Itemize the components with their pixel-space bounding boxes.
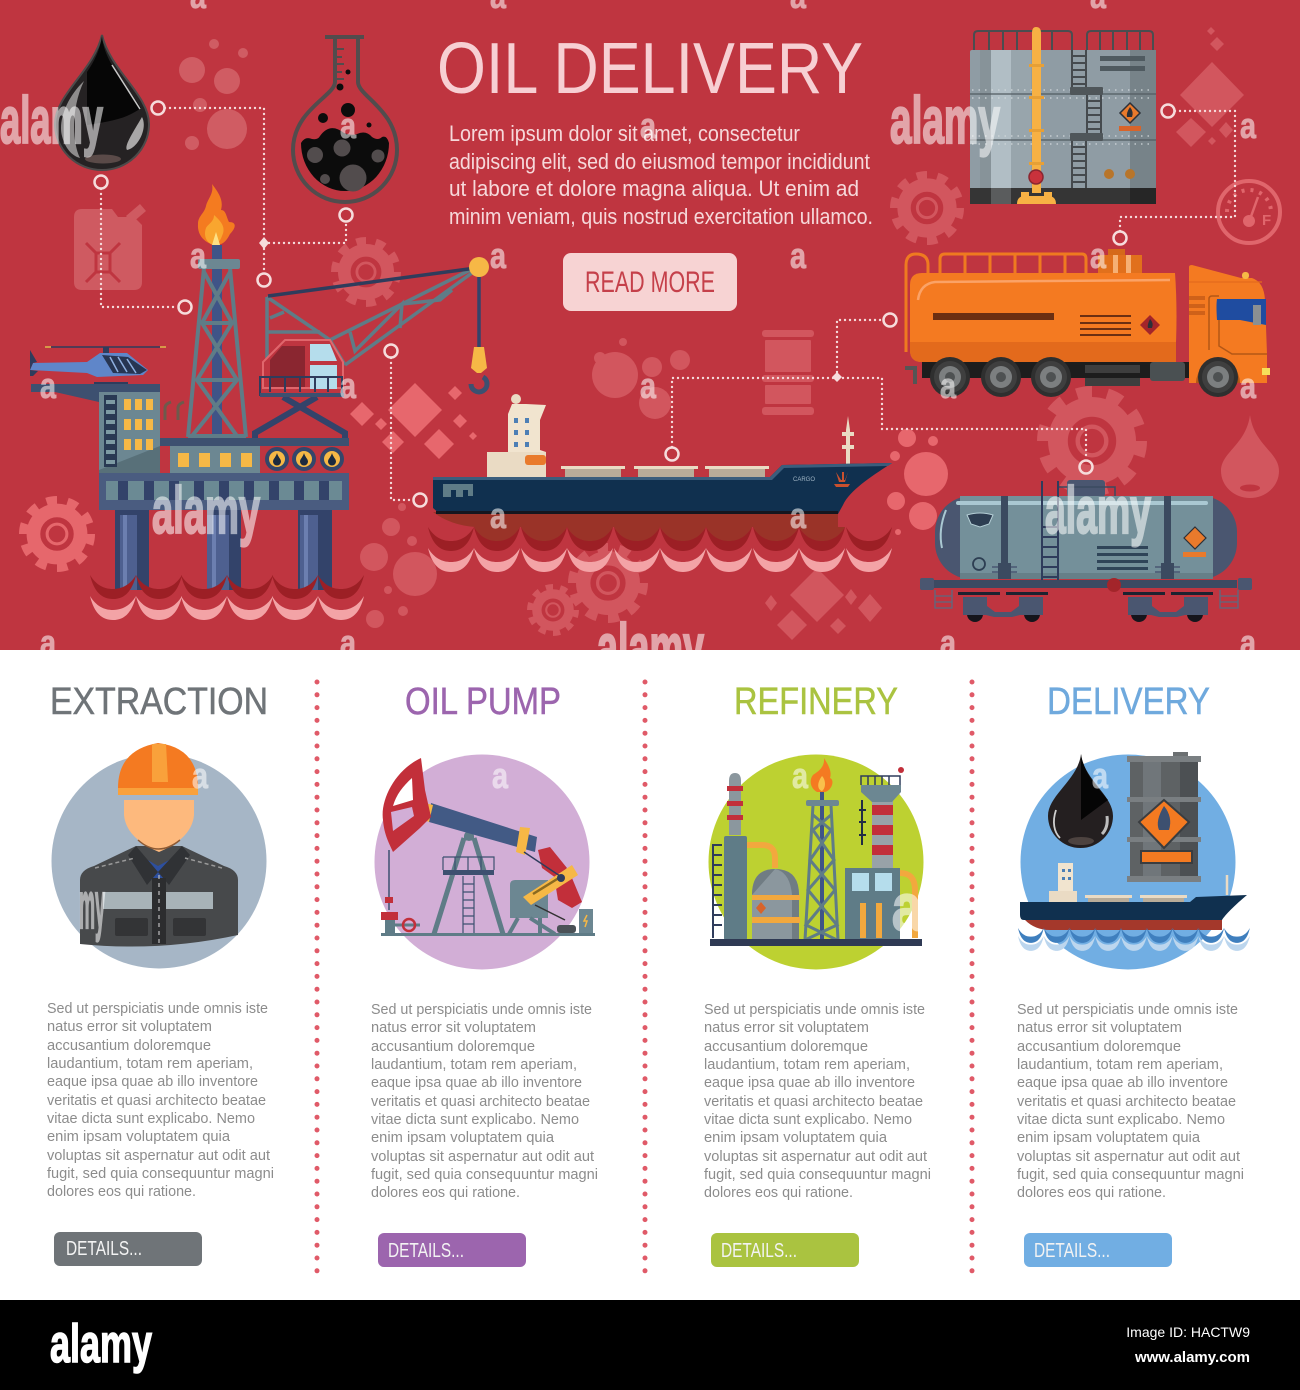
body text: delivery: Sed ut perspiciatis unde omnis iste xyxy=(1017,1001,1238,1018)
decorative background icons xyxy=(24,27,1280,640)
illustration: storage tank xyxy=(970,27,1156,204)
icon: refinery xyxy=(708,754,924,970)
watermark overlays: a xyxy=(1240,365,1257,406)
exhaust pipes xyxy=(165,402,184,420)
watermark overlays: a xyxy=(192,755,209,796)
watermark overlays: a xyxy=(340,365,357,406)
derrick xyxy=(188,245,246,438)
body text: oil pump: Sed ut perspiciatis unde omnis iste xyxy=(371,1001,592,1018)
column: delivery xyxy=(1017,681,1250,1267)
icon: worker xyxy=(52,743,266,968)
body text: refinery: voluptas sit aspernatur aut odit aut xyxy=(704,1148,928,1165)
icon: flask xyxy=(293,35,397,202)
truck wheels xyxy=(930,357,1238,397)
tank ladders xyxy=(1072,50,1101,188)
watermark overlays: a xyxy=(490,495,507,536)
heading: delivery: DELIVERY xyxy=(1047,681,1210,723)
body text: oil pump: vitae dicta sunt explicabo. Nemo xyxy=(371,1111,579,1128)
watermark overlays: a xyxy=(1090,235,1107,276)
body text: extraction: fugit, sed quia consequuntur magni xyxy=(47,1165,274,1182)
platform waves xyxy=(90,575,364,620)
decor: bubbles left of ship xyxy=(360,503,437,628)
watermark overlays xyxy=(0,0,1257,944)
delivery waves xyxy=(1018,928,1250,951)
read more button xyxy=(563,253,737,311)
column: extraction xyxy=(47,681,274,1266)
watermark overlays: a xyxy=(340,622,357,663)
decor: large drop xyxy=(1221,415,1279,498)
crane xyxy=(255,257,489,438)
ship hull: CARGO xyxy=(793,477,815,483)
body text: extraction: laudantium, totam rem aperiam, xyxy=(47,1055,253,1072)
footer image id: Image ID: HACTW9 xyxy=(1126,1324,1250,1340)
footer logo: alamy xyxy=(50,1314,152,1374)
watermark overlays: a xyxy=(790,495,807,536)
watermark overlays: alamy xyxy=(0,83,103,157)
body text: extraction: eaque ipsa quae ab illo inventore xyxy=(47,1073,258,1090)
ship deck containers xyxy=(561,466,769,477)
body text: refinery: dolores eos qui ratione. xyxy=(704,1184,853,1201)
decor: barrel xyxy=(762,330,814,415)
column: refinery xyxy=(704,681,931,1267)
decor: diamonds left xyxy=(350,383,477,459)
body text: oil pump: enim ipsam voluptatem quia xyxy=(371,1129,555,1146)
heading: extraction: EXTRACTION xyxy=(50,681,268,723)
ship red hull xyxy=(433,512,845,542)
watermark overlays: a xyxy=(490,235,507,276)
watermark overlays: alamy xyxy=(597,610,704,684)
body text: extraction: accusantium doloremque xyxy=(47,1037,211,1054)
helicopter xyxy=(30,347,166,383)
watermark overlays: a xyxy=(1240,105,1257,146)
title: OIL DELIVERY xyxy=(437,29,863,109)
accommodation block xyxy=(31,384,160,473)
ship hull xyxy=(433,463,892,514)
body text: delivery: fugit, sed quia consequuntur magni xyxy=(1017,1166,1244,1183)
decor: diamonds top right xyxy=(1176,27,1244,147)
watermark overlays: alamy xyxy=(1045,473,1151,547)
intro paragraph: Lorem ipsum dolor sit amet, consectetur xyxy=(449,121,800,146)
gas flame xyxy=(198,184,235,245)
oil barrel xyxy=(1127,752,1201,882)
distillation column xyxy=(713,773,747,940)
wagon bogies xyxy=(958,592,1213,622)
button: refinery details xyxy=(711,1233,859,1267)
body text: refinery: eaque ipsa quae ab illo inventore xyxy=(704,1074,915,1091)
body text: refinery: Sed ut perspiciatis unde omnis iste xyxy=(704,1001,925,1018)
body text: delivery: dolores eos qui ratione. xyxy=(1017,1184,1166,1201)
small tanker ship xyxy=(1020,863,1247,930)
heading: oil pump: OIL PUMP xyxy=(405,681,561,723)
intro paragraph: ut labore et dolore magna aliqua. Ut enim ad xyxy=(449,176,859,201)
body text: extraction: Sed ut perspiciatis unde omnis iste xyxy=(47,1000,268,1017)
watermark overlays: a xyxy=(190,235,207,276)
watermark overlays: a xyxy=(940,365,957,406)
upper deck xyxy=(160,438,349,473)
body text: oil pump: veritatis et quasi architecto beatae xyxy=(371,1093,590,1110)
button: extraction details: DETAILS... xyxy=(66,1238,142,1260)
watermark overlays: a xyxy=(792,755,809,796)
body text: oil pump: dolores eos qui ratione. xyxy=(371,1184,520,1201)
heading: refinery: REFINERY xyxy=(734,681,898,723)
connector lines xyxy=(94,102,1235,506)
body text: refinery: fugit, sed quia consequuntur magni xyxy=(704,1166,931,1183)
watermark overlays: a xyxy=(640,105,657,146)
watermark overlays: a xyxy=(892,870,923,944)
body text: oil pump: accusantium doloremque xyxy=(371,1038,535,1055)
body text: oil pump: eaque ipsa quae ab illo inventore xyxy=(371,1074,582,1091)
body text: extraction: natus error sit voluptatem xyxy=(47,1018,212,1035)
ship superstructure xyxy=(487,394,546,477)
icon: oil drop xyxy=(55,35,149,170)
decor: bubbles top left xyxy=(179,39,248,150)
intro paragraph: minim veniam, quis nostrud exercitation ullamco. xyxy=(449,204,873,229)
flare derrick xyxy=(805,758,839,940)
watermark overlays: a xyxy=(492,755,509,796)
counterweight and motor xyxy=(509,847,593,934)
decor: bubbles right of ship xyxy=(887,429,948,535)
pump frame xyxy=(434,838,503,934)
body text: oil pump xyxy=(371,1001,598,1201)
decor: fuel gauge xyxy=(1218,181,1280,243)
decor: jerry can xyxy=(74,204,146,290)
hazard sign xyxy=(1119,103,1141,131)
connector nodes xyxy=(94,102,1174,506)
body text: oil pump: laudantium, totam rem aperiam, xyxy=(371,1056,577,1073)
main deck xyxy=(99,473,349,510)
platform legs xyxy=(115,505,332,590)
truck chassis xyxy=(905,362,1190,386)
dotted column dividers xyxy=(317,682,972,1272)
illustration: oil platform xyxy=(30,184,489,620)
illustration: tanker truck xyxy=(905,249,1270,397)
read more button: READ MORE xyxy=(585,266,715,299)
body text: extraction: dolores eos qui ratione. xyxy=(47,1183,196,1200)
button: extraction details xyxy=(54,1232,202,1266)
truck cab xyxy=(1189,265,1270,383)
small oil drop xyxy=(1048,754,1113,848)
ship mast xyxy=(842,416,854,464)
body text: oil pump: fugit, sed quia consequuntur magni xyxy=(371,1166,598,1183)
footer bar xyxy=(0,1300,1300,1390)
icon: delivery xyxy=(1018,752,1250,970)
decor: gears xyxy=(24,175,1140,633)
body text: refinery: vitae dicta sunt explicabo. Nemo xyxy=(704,1111,912,1128)
body text: delivery: eaque ipsa quae ab illo inventore xyxy=(1017,1074,1228,1091)
storage vessel xyxy=(752,869,800,940)
body text: delivery: natus error sit voluptatem xyxy=(1017,1019,1182,1036)
body text: refinery: laudantium, totam rem aperiam, xyxy=(704,1056,910,1073)
body text: extraction xyxy=(47,1000,274,1200)
watermark overlays: alamy xyxy=(890,83,1000,157)
body text: extraction: vitae dicta sunt explicabo. Nemo xyxy=(47,1110,255,1127)
body text: oil pump: natus error sit voluptatem xyxy=(371,1019,536,1036)
watermark overlays: a xyxy=(640,365,657,406)
watermark overlays: a xyxy=(40,365,57,406)
button: delivery details: DETAILS... xyxy=(1034,1240,1110,1262)
intro paragraph: adipiscing elit, sed do eiusmod tempor incididunt xyxy=(449,149,870,174)
decor: fuel gauge: F xyxy=(1262,212,1271,229)
button: oil pump details xyxy=(378,1233,526,1267)
watermark overlays: a xyxy=(790,235,807,276)
body text: extraction: enim ipsam voluptatem quia xyxy=(47,1128,231,1145)
watermark overlays: my xyxy=(79,868,105,942)
body text: refinery: accusantium doloremque xyxy=(704,1038,868,1055)
background: white lower panel xyxy=(0,650,1300,1300)
body text: refinery: natus error sit voluptatem xyxy=(704,1019,869,1036)
body text: oil pump: voluptas sit aspernatur aut odit aut xyxy=(371,1148,595,1165)
footer url: www.alamy.com xyxy=(1134,1349,1250,1366)
watermark overlays: a xyxy=(340,105,357,146)
body text: delivery xyxy=(1017,1001,1244,1201)
illustration: cargo ship xyxy=(428,394,892,572)
body text: refinery: enim ipsam voluptatem quia xyxy=(704,1129,888,1146)
button: delivery details xyxy=(1024,1233,1172,1267)
walking beam xyxy=(383,758,537,910)
watermark overlays: a xyxy=(940,622,957,663)
decor: diamonds bottom xyxy=(765,568,882,640)
body text: delivery: laudantium, totam rem aperiam, xyxy=(1017,1056,1223,1073)
background: red header panel xyxy=(0,0,1300,650)
watermark overlays: alamy xyxy=(152,473,260,547)
watermark overlays: a xyxy=(1092,755,1109,796)
body text: delivery: accusantium doloremque xyxy=(1017,1038,1181,1055)
decor: bubbles middle xyxy=(592,338,690,419)
body text: delivery: voluptas sit aspernatur aut odit aut xyxy=(1017,1148,1241,1165)
icon: pump jack xyxy=(374,754,595,970)
body text: delivery: enim ipsam voluptatem quia xyxy=(1017,1129,1201,1146)
button: refinery details: DETAILS... xyxy=(721,1240,797,1262)
body text: delivery: vitae dicta sunt explicabo. Nemo xyxy=(1017,1111,1225,1128)
button: oil pump details: DETAILS... xyxy=(388,1240,464,1262)
watermark overlays: a xyxy=(40,622,57,663)
illustration: rail tank wagon xyxy=(920,480,1252,622)
body text: delivery: veritatis et quasi architecto beatae xyxy=(1017,1093,1236,1110)
column: oil pump xyxy=(371,681,598,1267)
intro paragraph xyxy=(449,121,873,229)
body text: refinery xyxy=(704,1001,931,1201)
body text: refinery: veritatis et quasi architecto beatae xyxy=(704,1093,923,1110)
body text: extraction: voluptas sit aspernatur aut odit aut xyxy=(47,1147,271,1164)
well head xyxy=(381,897,420,933)
watermark overlays: a xyxy=(1240,622,1257,663)
ship waves xyxy=(428,527,892,572)
chimney tower xyxy=(845,767,915,940)
body text: extraction: veritatis et quasi architecto beatae xyxy=(47,1092,266,1109)
